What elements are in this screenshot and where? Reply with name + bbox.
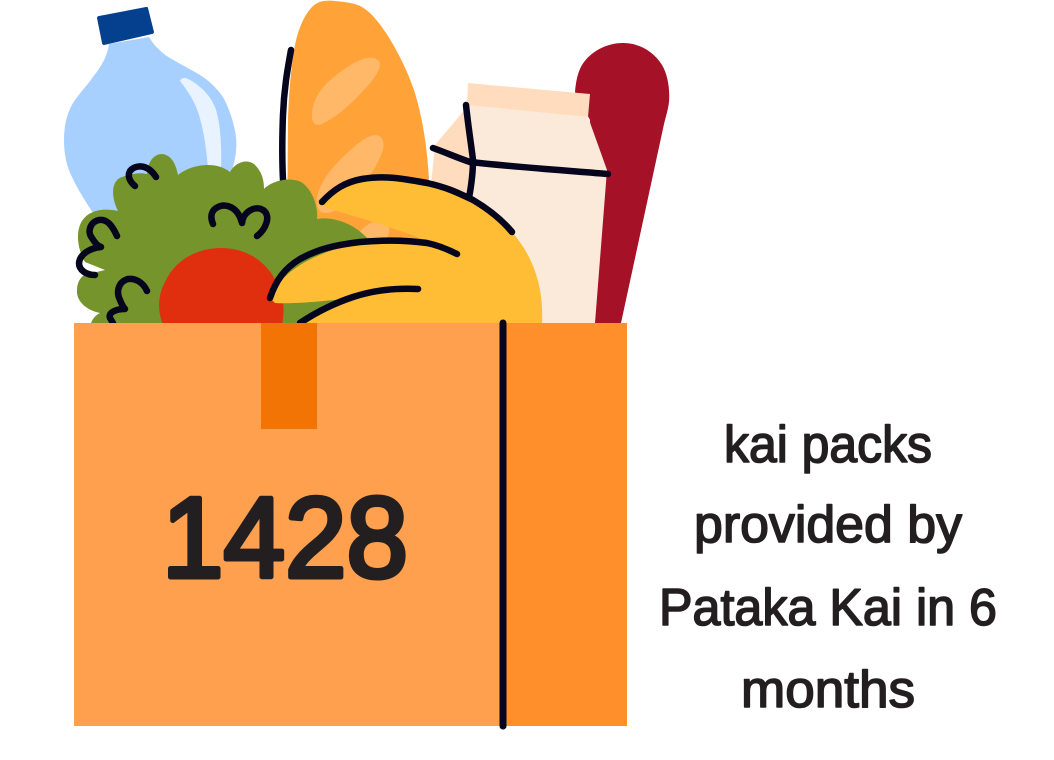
text block: caption: Pataka Kai in 6 [659,579,997,637]
carton top flap [467,83,590,117]
number: 1428: 1428 [162,475,408,602]
text block: caption [659,416,997,719]
text block: caption: kai packs [724,416,932,474]
icon: bananas [270,177,542,323]
carton front panel [468,105,607,323]
text block: caption: provided by [694,496,962,554]
icon: milk carton [431,83,608,323]
icon: box tape [261,323,317,429]
icon: water bottle [64,7,236,240]
icon: tomato [159,248,284,325]
icon: dark red bottle [575,43,669,323]
carton side panel [431,107,480,240]
text block: caption: months [741,661,915,719]
icon: leafy greens [77,154,372,323]
panel: cardboard box [74,323,627,726]
icon: baguette bread [282,1,432,250]
